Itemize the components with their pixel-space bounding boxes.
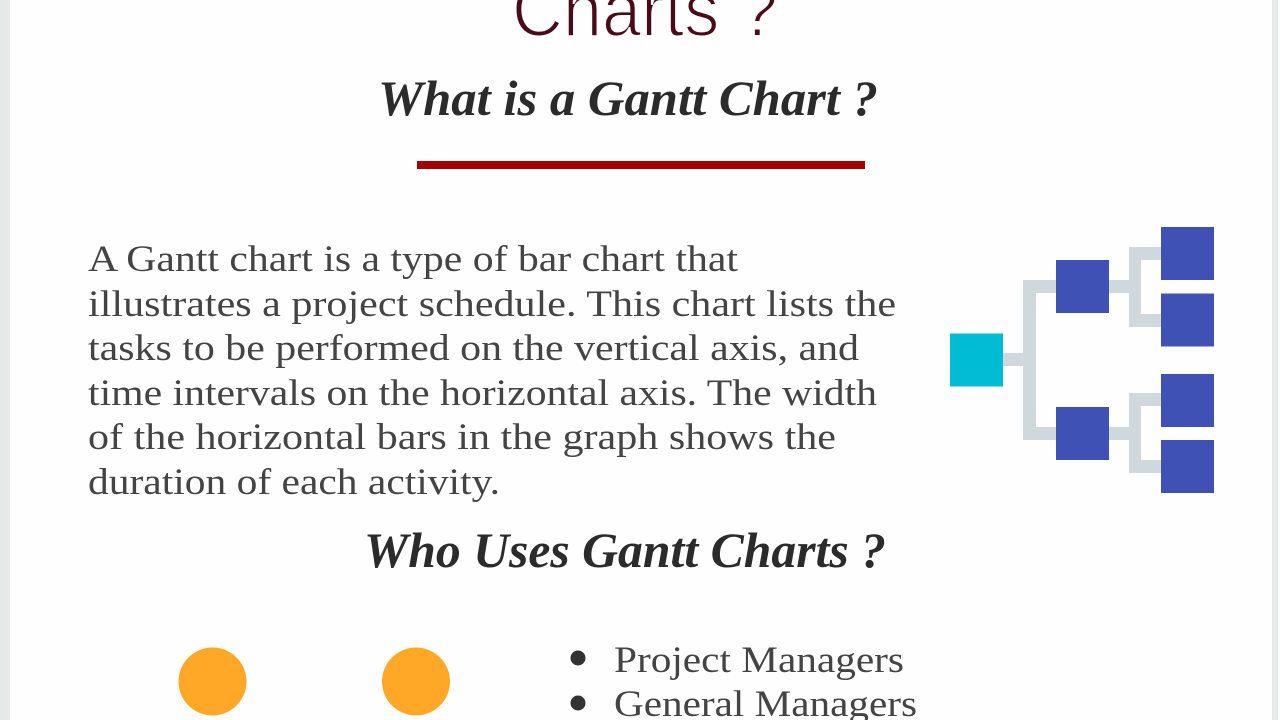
icon: orange circle left [178,648,246,716]
text block: Gantt chart definition: illustrates a project schedule. This chart lists the [88,284,896,325]
text block: Gantt chart definition: tasks to be performed on the vertical axis, and [88,328,860,369]
text block: Gantt chart definition: of the horizontal bars in the graph shows the [88,417,836,458]
text block: Gantt chart definition [88,239,896,503]
red divider [417,161,865,169]
text block: Gantt chart definition: duration of each activity. [88,462,500,503]
text block: Gantt chart definition: A Gantt chart is a type of bar chart that [88,239,739,280]
list: users of Gantt charts: Project Managers [614,640,904,681]
list: users of Gantt charts [570,640,917,720]
icon: hierarchy tree diagram [950,227,1214,493]
text block: Gantt chart definition: time intervals on the horizontal axis. The width [88,373,878,414]
heading: who uses Gantt charts: Who Uses Gantt Charts ? [364,522,886,578]
icon: orange circle right [382,648,450,716]
heading: what is a Gantt chart: What is a Gantt Chart ? [378,70,878,126]
